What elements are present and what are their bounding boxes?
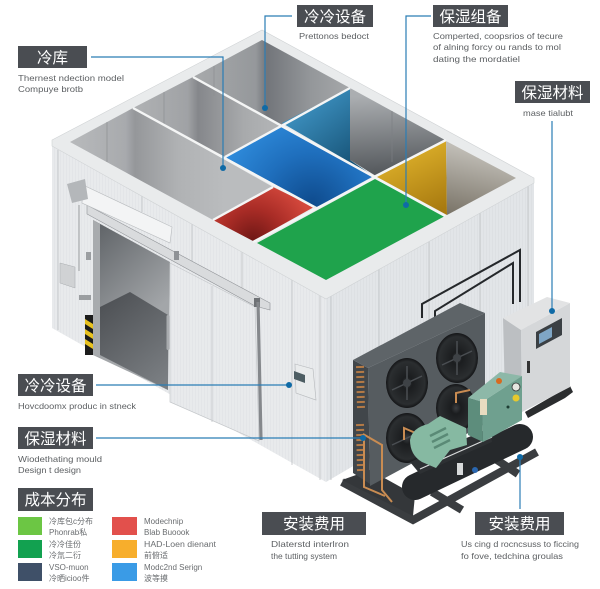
cold room building xyxy=(52,30,534,482)
door rail xyxy=(87,205,270,310)
label: cold room: Thernest ndection model xyxy=(18,73,124,83)
compartment: grey right rear xyxy=(350,88,445,176)
compartment: green xyxy=(257,179,445,280)
condenser top xyxy=(353,303,485,368)
copper pipes xyxy=(363,390,470,502)
label: refrigeration top: Prettonos bedoct xyxy=(299,31,370,41)
cabinet feet xyxy=(525,386,573,418)
base frame xyxy=(342,452,537,520)
legend item: orange xyxy=(112,540,217,560)
legend item: blue: 波等摸 xyxy=(144,573,168,583)
label: installation cost middle: Dlaterstd interlron xyxy=(271,539,349,549)
leader: installation cost right xyxy=(517,454,523,509)
door panel xyxy=(170,263,259,441)
label: installation cost right: Us cing d rocncsuss to ficcing xyxy=(461,539,579,549)
label: insulation material left: Design t design xyxy=(18,465,81,475)
legend item: orange: 前俯适 xyxy=(144,550,168,560)
compartment: beige xyxy=(446,141,516,215)
handle xyxy=(166,315,170,350)
cabinet side xyxy=(503,318,522,412)
label: refrigeration left: Hovcdoomx produc in stneck xyxy=(18,401,137,411)
legend item: red: Modechnip xyxy=(144,517,184,526)
legend item: green: 冷冷佳份 xyxy=(49,539,81,549)
compressor base plate xyxy=(410,428,492,474)
filter drier xyxy=(457,463,478,475)
label: refrigeration left xyxy=(18,374,137,411)
legend item: blue: Modc2nd Serign xyxy=(144,563,202,572)
motor xyxy=(67,179,88,203)
leader: refrigeration top xyxy=(262,16,292,111)
legend item: red: Blab Buoook xyxy=(144,528,190,537)
label: insulation material right xyxy=(515,81,590,118)
compartment: grey front left xyxy=(70,108,273,220)
label: installation cost middle xyxy=(262,512,366,561)
sliding door xyxy=(60,179,270,441)
compartment: grey middle xyxy=(133,77,281,157)
label: insulation assembly: dating the mordatiel xyxy=(433,54,520,64)
label: cold room xyxy=(18,46,124,94)
compartment: red xyxy=(213,187,314,241)
label: insulation material left: Wiodethating mould xyxy=(18,454,102,464)
fans xyxy=(386,333,478,463)
compartment: grey rear xyxy=(193,40,350,125)
legend item: navy: VSO-muon xyxy=(49,563,89,572)
top rim xyxy=(52,30,534,299)
refrigerant pipes xyxy=(422,250,520,318)
compressor xyxy=(410,416,467,468)
legend item: orange: HAD-Loen dienant xyxy=(144,540,217,549)
control cabinet xyxy=(503,297,573,418)
condensing unit xyxy=(342,303,537,520)
label: insulation material right: mase tialubt xyxy=(523,108,574,118)
condenser side coil xyxy=(353,360,370,484)
legend title: 成本分布 xyxy=(24,491,87,509)
cabinet front xyxy=(521,303,570,412)
legend item: navy xyxy=(18,563,89,583)
condenser face xyxy=(368,313,485,486)
cabinet screen xyxy=(536,318,562,349)
legend item: light green: 冷库包c分布 xyxy=(49,516,93,526)
label: installation cost right xyxy=(461,512,579,561)
label: installation cost middle: the tutting system xyxy=(271,551,337,561)
header cover xyxy=(82,185,172,243)
leader: refrigeration left xyxy=(96,382,292,388)
leader: insulation material left xyxy=(96,435,366,441)
label: insulation assembly: Comperted, coopsrios of tecure xyxy=(433,31,563,41)
legend xyxy=(18,488,217,583)
label: insulation material right: 保湿材料 xyxy=(521,84,584,102)
label: refrigeration left: 冷冷设备 xyxy=(24,377,87,395)
hazard stripe xyxy=(85,315,93,355)
label: cold room: 冷库 xyxy=(37,49,68,67)
label: installation cost middle: 安装费用 xyxy=(283,515,345,533)
label: insulation assembly: 保湿组备 xyxy=(439,8,502,26)
label: insulation material left: 保湿材料 xyxy=(24,430,87,448)
label: installation cost right: fo fove, tedchina groulas xyxy=(461,551,563,561)
label: insulation assembly xyxy=(433,5,563,64)
door opening xyxy=(93,220,170,390)
door floor xyxy=(100,292,168,390)
left wall xyxy=(52,143,326,482)
legend item: light green: Phonrab私 xyxy=(49,528,87,537)
legend item: light green xyxy=(18,516,93,537)
label: insulation material left xyxy=(18,427,102,475)
label: refrigeration top xyxy=(297,5,373,41)
legend item: red xyxy=(112,517,190,537)
compartment: teal blue wall xyxy=(282,88,372,175)
wall thermostat xyxy=(294,364,316,400)
legend item: green xyxy=(18,539,81,560)
electrical box xyxy=(468,372,522,442)
compartment: blue xyxy=(225,126,372,207)
side control unit xyxy=(60,263,75,288)
cabinet top xyxy=(503,297,570,330)
legend title xyxy=(18,488,93,511)
compartment: yellow xyxy=(377,141,447,215)
door hardware xyxy=(78,205,91,300)
receiver tank xyxy=(415,437,520,487)
label: cold room: Compuye brotb xyxy=(18,84,83,94)
label: refrigeration top: 冷冷设备 xyxy=(304,8,366,26)
legend item: blue xyxy=(112,563,202,583)
leader: insulation material right xyxy=(549,121,555,314)
label: installation cost right: 安装费用 xyxy=(488,515,551,533)
legend item: green: 冷氚二衍 xyxy=(49,550,81,560)
legend item: navy: 冷晒icioo件 xyxy=(49,573,89,583)
right wall xyxy=(326,181,534,482)
leader: cold room xyxy=(91,57,226,171)
leader: insulation assembly xyxy=(403,16,431,208)
label: insulation assembly: of alning forcy ou rands to mol xyxy=(433,42,561,52)
